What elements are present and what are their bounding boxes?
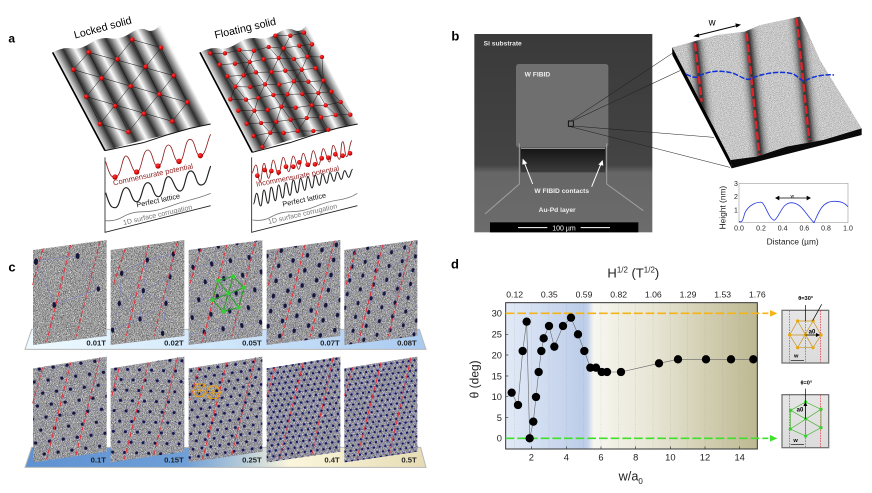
- height profile chart: 2: [734, 194, 738, 201]
- panel: a: [8, 15, 358, 232]
- scatter chart: 5: [497, 413, 502, 423]
- scatter chart: 6: [598, 452, 604, 462]
- tile 0.02T: 0.02T: [164, 338, 184, 347]
- locked solid potential diagram: Commensurate potential: [112, 161, 194, 187]
- SEM image: W FIBID: [525, 71, 550, 78]
- scatter chart: 1.76: [749, 290, 766, 300]
- height profile chart: Distance (µm): [767, 236, 819, 246]
- tile 0.5T: 0.5T: [401, 455, 417, 464]
- locked solid potential diagram: 1D surface corrugation: [123, 204, 193, 227]
- floating solid potential diagram: Perfect lattice: [282, 191, 327, 209]
- inset: theta 30 degrees: w: [793, 354, 799, 360]
- height profile chart: 0.2: [756, 225, 766, 232]
- height profile chart: 0.0: [734, 225, 744, 232]
- SEM image: 100 µm: [552, 225, 576, 232]
- locked solid potential diagram: Perfect lattice: [136, 191, 181, 209]
- scatter chart: 30: [492, 309, 502, 319]
- scatter chart: θ (deg): [467, 360, 481, 398]
- tile 0.25T: [189, 357, 262, 464]
- inset: theta 0 degrees: w: [792, 438, 798, 444]
- tile 0.5T: [344, 357, 417, 464]
- scatter chart: 10: [665, 452, 676, 462]
- tile 0.01T: 0.01T: [86, 338, 106, 347]
- label c: c: [8, 259, 16, 274]
- tile 0.05T: 0.05T: [242, 338, 262, 347]
- scatter chart: 0: [497, 434, 502, 444]
- panel: d: [451, 257, 829, 486]
- height profile chart: 3: [734, 181, 738, 188]
- width arrow w: [693, 17, 741, 37]
- tile 0.08T: [344, 240, 417, 347]
- top axis title: 1/2: [644, 266, 655, 275]
- floating solid potential diagram: 1D surface corrugation: [268, 203, 338, 226]
- tile 0.15T: 0.15T: [164, 455, 184, 464]
- tile 0.07T: 0.07T: [320, 338, 340, 347]
- scatter chart: 1.53: [714, 290, 731, 300]
- inset: theta 0 degrees: [782, 381, 829, 448]
- floating solid potential diagram: Incommensurate potential: [255, 164, 340, 189]
- height profile chart: Height (nm): [718, 186, 728, 229]
- height profile chart: 0.4: [778, 225, 788, 232]
- platform bottom row: [25, 447, 426, 467]
- inset: theta 30 degrees: [782, 296, 829, 363]
- top axis title: ): [655, 265, 659, 280]
- panel: b: [451, 13, 862, 246]
- AFM 3D topography: [672, 13, 862, 168]
- SEM image: Au-Pd layer: [539, 207, 576, 214]
- scatter chart: 14: [734, 452, 745, 462]
- height profile chart: 1.0: [843, 225, 853, 232]
- height profile chart: 0.8: [821, 225, 831, 232]
- floating solid surface: [200, 25, 358, 152]
- width arrow w: w: [708, 17, 716, 28]
- top axis title: (T: [628, 265, 644, 280]
- floating solid potential diagram: [252, 141, 357, 232]
- scatter chart: 25: [492, 330, 502, 340]
- SEM image: Si substrate: [484, 41, 522, 48]
- tile 0.08T: 0.08T: [397, 338, 417, 347]
- scatter chart: 10: [492, 392, 502, 402]
- scatter chart: 12: [700, 452, 710, 462]
- inset: theta 0 degrees: θ=0°: [800, 381, 813, 387]
- height profile chart: [718, 181, 853, 246]
- scatter chart: 2: [529, 452, 534, 462]
- scatter chart: 20: [492, 350, 502, 360]
- height profile chart: w: [791, 193, 795, 199]
- scatter chart: w/a: [619, 470, 638, 484]
- scatter chart: 0.82: [610, 290, 627, 300]
- zoom lines: [569, 53, 730, 167]
- SEM image: W FIBID contacts: [534, 188, 589, 195]
- scatter chart: 0.35: [541, 290, 558, 300]
- tile 0.1T: [33, 357, 107, 464]
- scatter chart: 1.29: [680, 290, 697, 300]
- label b: b: [451, 28, 459, 43]
- SEM image: [474, 34, 652, 232]
- scatter chart: 4: [564, 452, 569, 462]
- platform top row: [25, 329, 426, 349]
- tile 0.15T: [111, 357, 184, 464]
- label a: a: [8, 31, 15, 45]
- tile 0.4T: [267, 357, 340, 464]
- heading: Floating solid: Floating solid: [213, 16, 277, 42]
- tile 0.4T: 0.4T: [324, 455, 340, 464]
- heading: Locked solid: Locked solid: [73, 15, 133, 42]
- scatter chart: 1.06: [645, 290, 662, 300]
- inset: theta 30 degrees: a0: [809, 329, 816, 335]
- tile 0.02T: [111, 240, 184, 347]
- panel: c: [8, 240, 426, 467]
- tile 0.1T: 0.1T: [91, 455, 106, 464]
- top axis title: H: [607, 265, 617, 280]
- scatter chart: 0.12: [506, 290, 523, 300]
- tile 0.25T: 0.25T: [242, 455, 262, 464]
- scatter chart: [467, 290, 777, 486]
- tile 0.05T: [189, 240, 262, 347]
- label d: d: [451, 257, 459, 272]
- tile 0.07T: [267, 240, 340, 347]
- scatter chart: 8: [633, 452, 638, 462]
- top axis title: 1/2: [617, 266, 628, 275]
- scatter chart: 0: [638, 477, 643, 486]
- locked solid potential diagram: [105, 134, 211, 232]
- inset: theta 30 degrees: θ=30°: [798, 296, 814, 302]
- scatter chart: 0.59: [576, 290, 593, 300]
- height profile chart: 1: [734, 207, 738, 214]
- inset: theta 0 degrees: a0: [797, 408, 804, 414]
- height profile chart: 0.6: [799, 225, 809, 232]
- locked solid surface: [53, 25, 211, 151]
- scatter chart: 15: [492, 371, 502, 381]
- tile 0.01T: [33, 240, 107, 347]
